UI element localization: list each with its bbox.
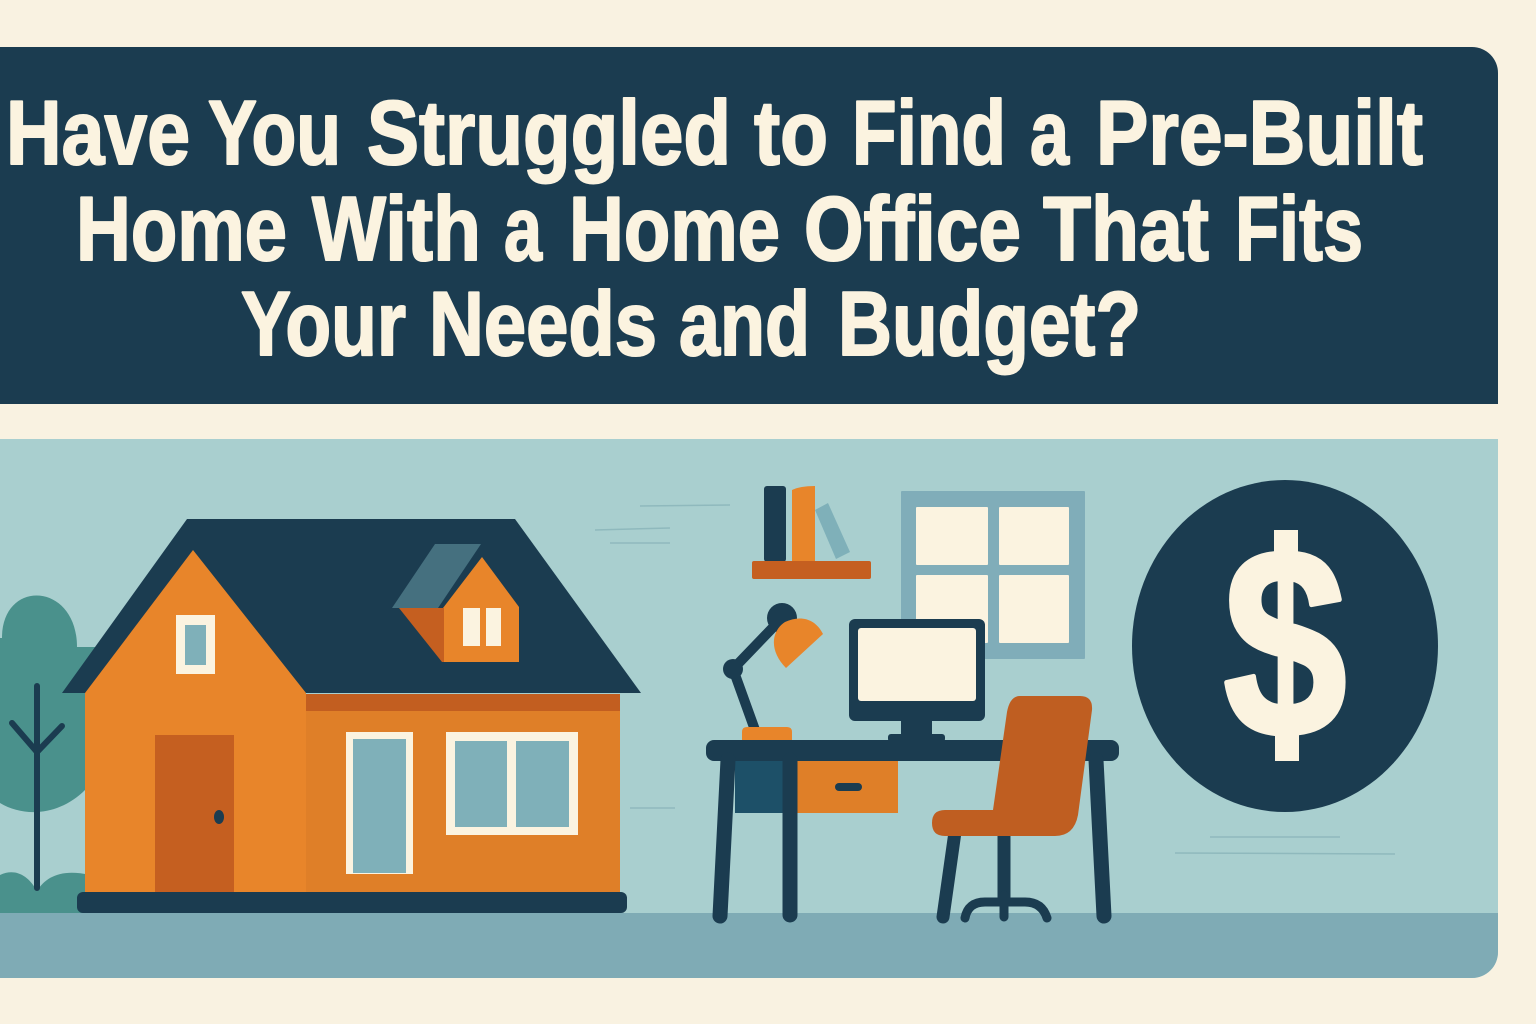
title line 1: Find [852, 83, 1006, 184]
title line 1: Pre-Built [1096, 83, 1423, 184]
door [155, 735, 234, 892]
house gable left [85, 550, 306, 892]
bookshelf [752, 486, 871, 579]
desk [706, 740, 1119, 916]
title line 1: You [208, 83, 341, 184]
drawer [797, 761, 898, 813]
desk lamp [723, 603, 823, 741]
motion lines [595, 505, 1395, 854]
house body right [306, 694, 620, 892]
title line 1: Struggled [367, 83, 731, 184]
illustration panel [0, 439, 1498, 978]
title line 2: With [312, 179, 481, 280]
office chair [932, 696, 1092, 918]
house [62, 519, 641, 913]
computer monitor [849, 619, 985, 742]
title line 2: That [1043, 179, 1209, 280]
title line 2: Home [76, 179, 287, 280]
title line 1: to [754, 83, 828, 184]
dollar sign: $ [1223, 493, 1347, 794]
title line 2: Office [804, 179, 1021, 280]
title line 3: Needs [429, 274, 657, 375]
title line 2: Fits [1235, 179, 1363, 280]
title line 3: and [679, 274, 810, 375]
tall window [346, 732, 413, 874]
title line 2: a [504, 179, 543, 280]
title banner [0, 47, 1498, 404]
wall window [901, 491, 1085, 659]
dollar icon [1132, 480, 1438, 812]
floor [0, 913, 1498, 978]
title line 1: a [1030, 83, 1070, 184]
wide window [446, 732, 578, 835]
title line 2: Home [569, 179, 780, 280]
roof [62, 519, 641, 693]
house base [77, 892, 627, 913]
title line 3: Your [241, 274, 406, 375]
gable window [176, 615, 215, 674]
title line 3: Budget? [838, 274, 1141, 375]
dormer [392, 544, 519, 662]
tree [0, 595, 95, 913]
title line 1: Have [6, 83, 190, 184]
